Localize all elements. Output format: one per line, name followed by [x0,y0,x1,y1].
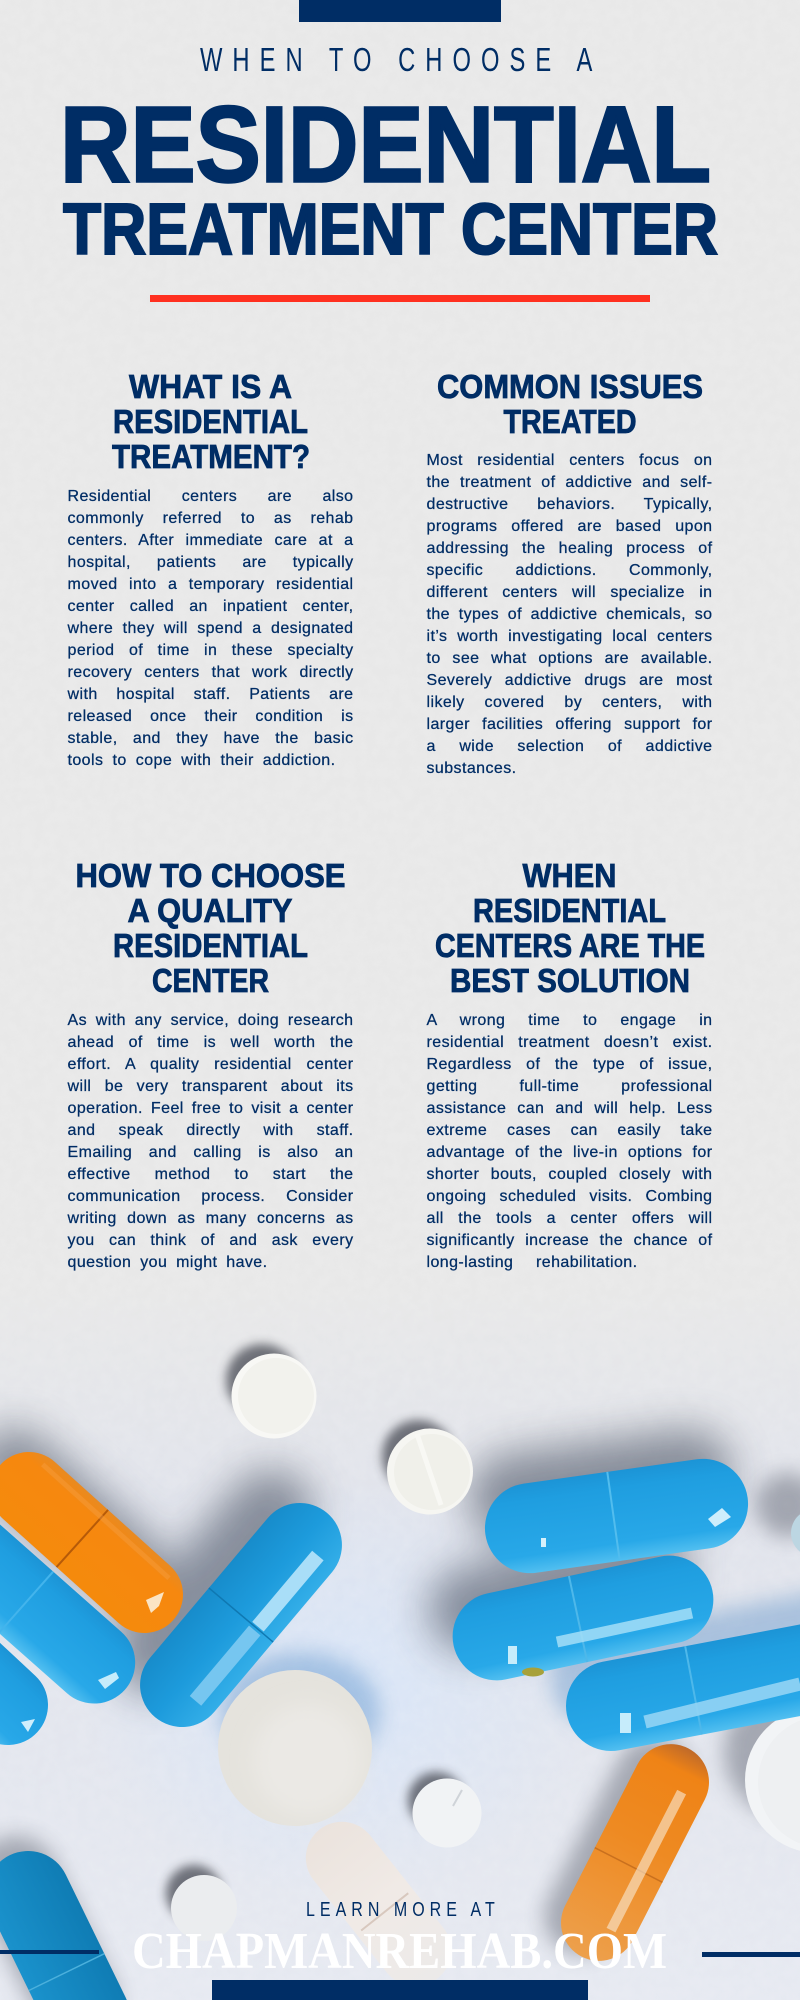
text: what is a residential treatment: tools to cope with their addiction. [68,752,336,769]
tablet: small round top [232,1354,316,1438]
tablet: large round [218,1670,372,1826]
text: how to choose a quality residential center: effort. A quality residential center [68,1056,354,1073]
capsule: blue bottom left [0,1837,144,2000]
capsule: blue top right [479,1453,754,1579]
text: what is a residential treatment: commonly referred to as rehab [68,510,354,527]
top bar [299,0,501,22]
text: how to choose a quality residential center: and speak directly with staff. [68,1122,354,1139]
text: how to choose a quality residential center [67,1012,354,1271]
capsule: blue middle right [444,1547,722,1689]
text: when residential centers are the best solution: extreme cases can easily take [426,1122,712,1139]
text: common issues treated: larger facilities offering support for [426,716,712,733]
text: common issues treated: it’s worth investigating local centers [426,628,712,645]
text: how to choose a quality residential center: effective method to start the [68,1166,354,1183]
footer call to action [132,1898,667,1980]
text: what is a residential treatment: period of time in these specialty [68,642,354,659]
title block [60,42,718,270]
heading: common issues treated: COMMON ISSUES [437,368,703,405]
heading: when residential centers are the best solution: RESIDENTIAL [473,892,666,929]
tablet: scored [387,1428,473,1514]
text: how to choose a quality residential center: As with any service, doing research [68,1012,354,1029]
text: how to choose a quality residential center: you can think of and ask every [68,1232,354,1249]
footer bottom bar [212,1980,588,2000]
text: what is a residential treatment: where they will spend a designated [68,620,354,637]
footer right line [702,1952,800,1957]
heading: when residential centers are the best solution: BEST SOLUTION [450,962,690,999]
capsule: orange right [548,1731,722,1974]
title line: treatment center: TREATMENT CENTER [63,190,718,270]
text: what is a residential treatment [67,488,354,769]
text: when residential centers are the best solution: shorter bouts, coupled closely with [426,1166,712,1183]
capsule: blue middle [123,1486,359,1744]
footer left line [0,1950,99,1954]
tablet: edge right [791,1509,800,1557]
text: common issues treated: to see what options are available. [426,650,712,667]
text: what is a residential treatment: with hospital staff. Patients are [68,686,354,703]
text: when residential centers are the best solution: getting full-time professional [426,1078,712,1095]
text: common issues treated: the types of addictive chemicals, so [426,606,712,623]
text: when residential centers are the best solution: assistance can and will help. Less [426,1100,712,1117]
text: what is a residential treatment: recovery centers that work directly [68,664,354,681]
text: how to choose a quality residential center: writing down as many concerns as [68,1210,354,1227]
text: common issues treated: substances. [426,760,517,777]
heading: how to choose a quality residential center [76,857,346,999]
capsule: orange left [0,1436,199,1649]
text: what is a residential treatment: stable, and they have the basic [68,730,354,747]
text: when residential centers are the best solution: A wrong time to engage in [426,1012,712,1029]
text: what is a residential treatment: released once their condition is [68,708,354,725]
heading: how to choose a quality residential center: CENTER [152,962,269,999]
text: what is a residential treatment: hospital, patients are typically [68,554,354,571]
text: when residential centers are the best solution: long-lasting rehabilitation. [426,1254,638,1271]
text: common issues treated: destructive behaviors. Typically, [426,496,712,513]
text: what is a residential treatment: center called an inpatient center, [68,598,354,615]
heading: when residential centers are the best solution [435,857,705,999]
heading: common issues treated [437,368,703,440]
capsule: blue small left [0,1594,65,1762]
heading: what is a residential treatment: RESIDENTIAL [113,403,308,440]
text: common issues treated: different centers will specialize in [426,584,712,601]
tablet: small lower [412,1778,482,1848]
text: common issues treated: likely covered by centers, with [426,694,712,711]
text: common issues treated: a wide selection of addictive [426,738,712,755]
heading: what is a residential treatment [112,368,310,475]
text: how to choose a quality residential center: Emailing and calling is also an [68,1144,354,1161]
text: common issues treated: the treatment of addictive and self- [426,474,712,491]
text: how to choose a quality residential center: will be very transparent about its [68,1078,354,1095]
heading: common issues treated: TREATED [504,403,636,440]
heading: how to choose a quality residential center: HOW TO CHOOSE [76,857,346,894]
tablet: big white right [745,1707,800,1853]
website: CHAPMANREHAB.COM [132,1923,667,1980]
capsule and tablet shadows [0,1344,800,2000]
capsule: translucent [291,1807,466,2000]
capsule: blue lower right [558,1611,800,1759]
learn more at: LEARN MORE AT [306,1898,495,1920]
heading: what is a residential treatment: WHAT IS A [129,368,292,405]
text: how to choose a quality residential center: communication process. Consider [68,1188,354,1205]
text: how to choose a quality residential center: question you might have. [68,1254,268,1271]
text: when residential centers are the best solution: advantage of the live-in options for [426,1144,712,1161]
text: when residential centers are the best solution: residential treatment doesn’t exist. [426,1034,712,1051]
tablet: small bottom left [171,1875,237,1941]
capsule: blue large left [0,1479,152,1720]
text: common issues treated: programs offered are based upon [426,518,712,535]
text: how to choose a quality residential center: operation. Feel free to visit a center [68,1100,354,1117]
text: common issues treated: Most residential centers focus on [426,452,712,469]
heading: how to choose a quality residential center: RESIDENTIAL [113,927,308,964]
title line: when to choose a: WHEN TO CHOOSE A [200,42,593,79]
heading: when residential centers are the best solution: CENTERS ARE THE [435,927,705,964]
text: common issues treated: Severely addictive drugs are most [426,672,712,689]
text: when residential centers are the best solution: all the tools a center offers will [426,1210,712,1227]
text: when residential centers are the best solution: ongoing scheduled visits. Combing [426,1188,712,1205]
text: common issues treated: specific addictions. Commonly, [426,562,712,579]
text: what is a residential treatment: moved into a temporary residential [68,576,354,593]
text: what is a residential treatment: centers. After immediate care at a [68,532,354,549]
text: common issues treated [426,452,712,777]
heading: how to choose a quality residential center: A QUALITY [128,892,292,929]
red divider [150,295,650,302]
text: when residential centers are the best solution: Regardless of the type of issue, [426,1056,712,1073]
text: common issues treated: addressing the healing process of [426,540,712,557]
text: when residential centers are the best solution: significantly increase the chance of [426,1232,712,1249]
text: when residential centers are the best solution [426,1012,712,1271]
heading: when residential centers are the best solution: WHEN [522,857,616,894]
text: what is a residential treatment: Residential centers are also [68,488,354,505]
text: how to choose a quality residential center: ahead of time is well worth the [68,1034,354,1051]
title line: residential: RESIDENTIAL [60,84,711,204]
heading: what is a residential treatment: TREATMENT? [112,438,310,475]
